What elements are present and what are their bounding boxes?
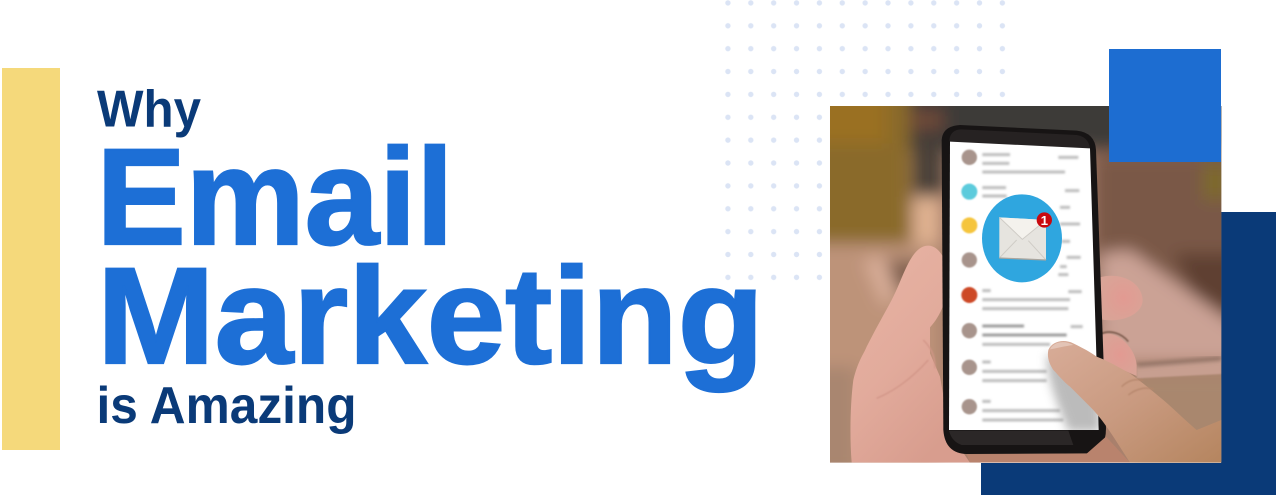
photo background [830, 106, 1222, 463]
heading line: is Amazing: is Amazing [96, 377, 356, 435]
heading line: Email: Email [96, 121, 454, 274]
knuckle creases [1122, 380, 1153, 395]
phone top band [949, 129, 1090, 148]
fingernail highlight [1050, 342, 1073, 349]
palm creases [877, 340, 935, 398]
finger shadow on screen [1047, 353, 1100, 432]
phone bottom band [949, 431, 1073, 445]
heading line: Why: Why [97, 80, 201, 138]
hand base below phone [967, 437, 1130, 463]
far fingers behind phone [1100, 276, 1143, 376]
email list rows [961, 150, 1100, 432]
row avatars [961, 150, 977, 414]
envelope [999, 217, 1046, 260]
palm and thumb [850, 246, 970, 463]
dot grid pattern [716, 0, 1014, 286]
heading line: Marketing: Marketing [97, 240, 764, 393]
email notification icon [982, 194, 1062, 282]
accent: navy block behind photo [981, 212, 1276, 495]
notification badge: 1 [1041, 213, 1049, 228]
title [96, 80, 764, 435]
photo: hand holding phone with email notification [830, 106, 1222, 463]
blue circle [982, 194, 1062, 282]
phone [942, 125, 1106, 454]
pointing finger [1048, 341, 1221, 463]
row text placeholders [982, 155, 1083, 420]
accent: blue square [1109, 49, 1221, 162]
accent: yellow vertical bar [2, 68, 60, 450]
phone screen [949, 142, 1099, 430]
phone body [942, 125, 1106, 454]
